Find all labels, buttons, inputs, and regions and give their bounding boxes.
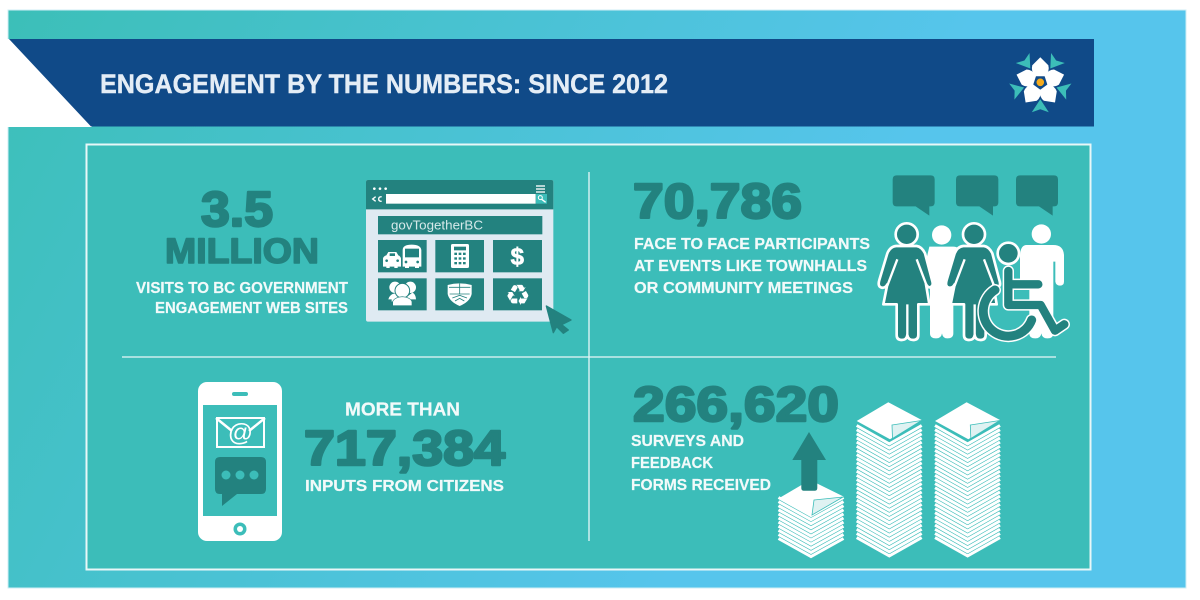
icon: email envelope: [216, 418, 265, 447]
main panel: [86, 144, 1090, 570]
icon: email envelope: @: [228, 419, 253, 447]
stat: 70,786 participants: FACE TO FACE PARTICIPANTS: [634, 236, 870, 253]
icon: browser window: govTogetherBC: [391, 218, 483, 233]
icon: dollar: $: [511, 244, 524, 271]
icon: browser window: [366, 180, 571, 333]
title banner: [7, 39, 1094, 127]
stat: 3.5 million visits: [136, 183, 348, 317]
icon: dogwood flower: [1009, 53, 1071, 112]
stat: 70,786 participants: AT EVENTS LIKE TOWNHALLS: [634, 258, 867, 275]
icon: recycle: ♻: [505, 278, 531, 312]
stat: 3.5 million visits: ENGAGEMENT WEB SITES: [155, 300, 348, 317]
stat: 3.5 million visits: VISITS TO BC GOVERNMENT: [136, 280, 348, 297]
icon: cursor: [546, 306, 571, 333]
icon: tall paper stack: [857, 402, 922, 556]
stat: 717,384 inputs: 717,384: [304, 422, 505, 476]
icon: small paper stack with arrow: [778, 432, 844, 556]
icon: taxi and bus: [383, 245, 421, 268]
stat: 266,620 surveys: [631, 378, 839, 494]
stat: 70,786 participants: 70,786: [633, 175, 802, 229]
stat: 266,620 surveys: SURVEYS AND: [631, 433, 744, 450]
women: [879, 223, 1000, 340]
speech bubbles: [893, 175, 1058, 216]
icon: tall paper stack: [935, 402, 1000, 556]
icon: calculator: [451, 244, 469, 268]
stat: 70,786 participants: OR COMMUNITY MEETINGS: [634, 280, 853, 297]
icon: people with speech bubbles: [879, 175, 1064, 340]
title tile: govTogetherBC: [378, 216, 542, 234]
icon: smartphone: [198, 382, 282, 541]
icon: people: [388, 282, 416, 306]
stat: 717,384 inputs: MORE THAN: [345, 400, 460, 420]
stat: 266,620 surveys: 266,620: [633, 378, 839, 432]
stat: 717,384 inputs: INPUTS FROM CITIZENS: [305, 478, 504, 495]
icon: chat bubble: [215, 457, 266, 506]
title: ENGAGEMENT BY THE NUMBERS: SINCE 2012: [100, 69, 668, 99]
stat: 717,384 inputs: [304, 400, 505, 495]
stat: 3.5 million visits: 3.5: [201, 183, 273, 237]
icon: BC crest: [448, 283, 472, 306]
stat: 266,620 surveys: FORMS RECEIVED: [631, 477, 771, 494]
stat: 266,620 surveys: FEEDBACK: [631, 455, 713, 472]
stat: 70,786 participants: [633, 175, 870, 297]
stat: 3.5 million visits: MILLION: [165, 232, 319, 271]
wheelchair user: [983, 243, 1064, 336]
men: [925, 224, 1064, 338]
